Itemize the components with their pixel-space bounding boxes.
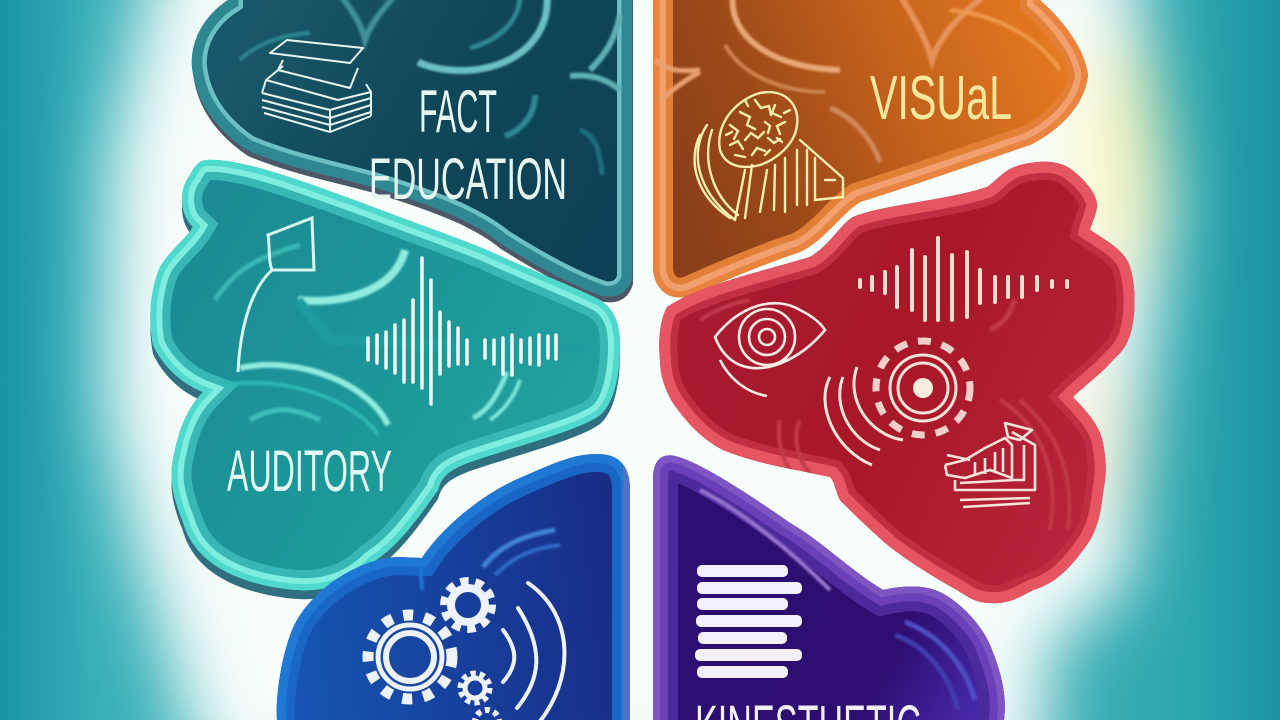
panel: red sensory — [659, 162, 1135, 603]
swirl decoration — [240, 0, 620, 175]
icon: sound wave — [860, 238, 1067, 320]
swirl decoration — [700, 490, 975, 710]
icon: stack of books — [262, 40, 371, 132]
text: visual: VISUaL — [870, 64, 1012, 133]
swirl decoration — [212, 242, 523, 436]
icon: gears and waves — [368, 582, 564, 720]
text: fact: FACT — [419, 78, 497, 145]
panel: blue — [277, 454, 630, 720]
swirl decoration — [700, 300, 1069, 530]
panel: auditory — [150, 160, 620, 599]
icon: typewriter — [945, 423, 1035, 507]
text: education: EDUCATION — [369, 147, 567, 212]
icon: gear with speaker — [825, 341, 970, 465]
icon: sound wave — [368, 258, 556, 404]
icon: brain and head — [695, 92, 843, 220]
icon: note shape — [238, 218, 314, 372]
swirl decoration — [420, 530, 560, 590]
panel: visual — [653, 0, 1088, 298]
panel: kinesthetic — [653, 455, 1005, 720]
swirl decoration — [655, 0, 1060, 162]
panel: fact education — [192, 0, 633, 302]
icon: text lines — [695, 565, 802, 678]
icon: eye — [715, 303, 825, 396]
text: auditory: AUDITORY — [227, 439, 392, 504]
